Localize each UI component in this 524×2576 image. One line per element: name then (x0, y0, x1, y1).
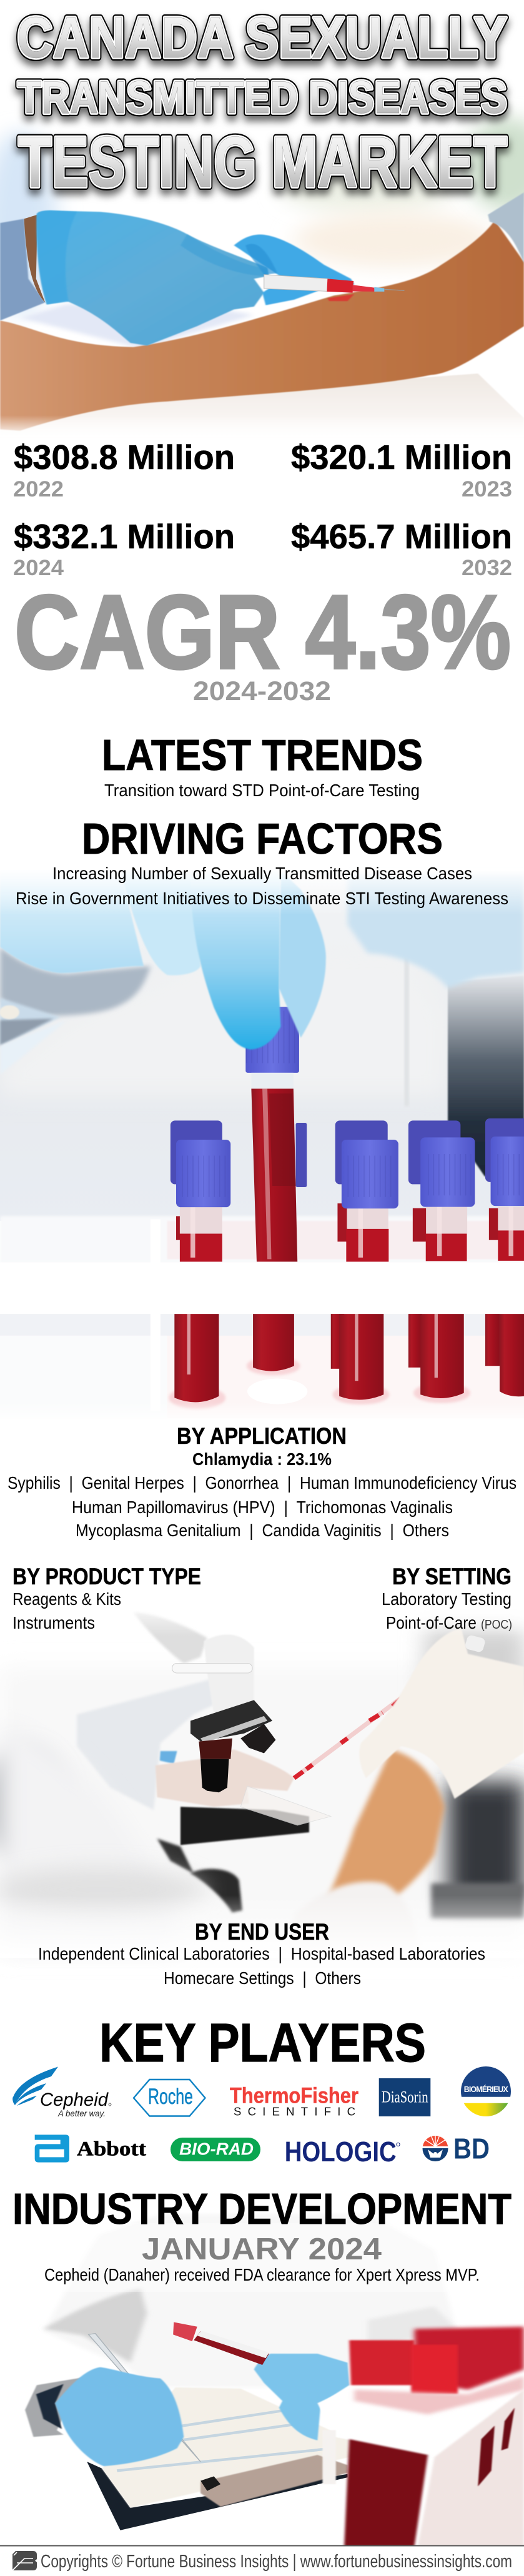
back caps (171, 1118, 524, 1187)
photo fade top (0, 868, 524, 915)
logo: Cepheid (12, 2067, 111, 2118)
stat 2024: 2024 (13, 556, 64, 580)
logo: Thermo Fisher Scientific: ThermoFisher (230, 2084, 358, 2108)
logo: DiaSorin: DiaSorin (382, 2088, 428, 2106)
logo: BD: BD (453, 2133, 490, 2165)
back tubes (176, 1203, 498, 1241)
segment: by end user (38, 1919, 485, 1988)
driving factors text (16, 864, 508, 908)
stat 2023: 2023 (462, 477, 512, 501)
photo fade top (0, 1599, 524, 1636)
stat 2032: $465.7 Million (291, 517, 512, 556)
logo: Roche: Roche (148, 2085, 193, 2109)
segment: by product type (12, 1564, 201, 1632)
segment: by product type: Instruments (12, 1613, 95, 1632)
segment: by application: Mycoplasma Genitalium | Candida Vaginitis | Others (76, 1521, 449, 1540)
market size stats (13, 438, 512, 580)
rack top (0, 1216, 524, 1264)
development date: JANUARY 2024 (142, 2233, 382, 2266)
segment: by setting (382, 1564, 512, 1632)
stat 2032 (291, 517, 512, 580)
photo fade bottom (0, 1895, 524, 1958)
photo: microscope and pipette (0, 1612, 524, 1953)
stat 2032: 2032 (462, 556, 512, 580)
logo: Cepheid: A better way. (57, 2108, 106, 2118)
stat 2023: $320.1 Million (291, 438, 512, 476)
logo: Roche (134, 2080, 205, 2116)
logo: Cepheid: Cepheid (40, 2090, 109, 2110)
lower tubes (174, 1314, 524, 1402)
photo fade bottom (0, 1402, 524, 1423)
pink halos (169, 1356, 470, 1409)
logo: Abbott (35, 2134, 146, 2163)
segment: by product type: BY PRODUCT TYPE (12, 1564, 201, 1589)
logo: Thermo Fisher Scientific: SCIENTIFIC (234, 2105, 355, 2118)
logo: Bio-Rad: BIO-RAD (179, 2139, 254, 2159)
CAGR period: 2024-2032 (193, 676, 331, 706)
segment: by application: Chlamydia : 23.1% (192, 1449, 332, 1469)
photo fade top (0, 2223, 524, 2292)
photo: gloved hand picking blood tube (0, 871, 524, 1418)
latest trends text: Transition toward STD Point-of-Care Testing (104, 781, 420, 800)
stat 2022: $308.8 Million (14, 438, 235, 476)
logo: Bio-Rad (171, 2138, 260, 2161)
segment: by product type: Reagents & Kits (12, 1589, 121, 1609)
photo: technician with blood test tube and clipboard (0, 2214, 524, 2547)
logo: bioMerieux: BIOMÉRIEUX (464, 2085, 508, 2094)
heading: key players: KEY PLAYERS (99, 2013, 426, 2073)
logo: BD (422, 2136, 488, 2161)
syringe (264, 275, 404, 293)
logo: Abbott: Abbott (77, 2138, 146, 2161)
stat 2023 (291, 438, 512, 501)
segment: by application (7, 1423, 517, 1540)
segment: by application: Human Papillomavirus (HPV) | Trichomonas Vaginalis (72, 1498, 453, 1517)
logo: Thermo Fisher Scientific (230, 2084, 358, 2118)
clipboard (87, 2387, 349, 2530)
stat 2024 (13, 517, 235, 580)
long tube (251, 1073, 297, 1261)
segment: by end user: Homecare Settings | Others (164, 1968, 361, 1988)
segment: by end user: Independent Clinical Laboratories | Hospital-based Laboratories (38, 1944, 485, 1963)
icon: Fortune Business Insights logo (12, 2551, 37, 2570)
segment: by end user: BY END USER (195, 1919, 329, 1945)
stat 2022 (13, 438, 235, 501)
title (17, 5, 507, 202)
footer (0, 2545, 524, 2576)
logo: bioMerieux (461, 2066, 511, 2116)
held cap (245, 1007, 299, 1073)
driving factors text: Increasing Number of Sexually Transmitted Disease Cases (52, 864, 472, 883)
stat 2022: 2022 (13, 477, 64, 501)
segment: by setting: (POC) (481, 1618, 512, 1632)
heading: driving factors: DRIVING FACTORS (82, 814, 443, 863)
logo: DiaSorin (379, 2078, 430, 2116)
photo: nurse drawing blood from arm (0, 117, 524, 437)
segment: by setting: Laboratory Testing (382, 1589, 512, 1609)
front tubes (180, 1207, 524, 1261)
front caps (176, 1137, 524, 1208)
blood test tube (173, 2322, 269, 2365)
stat 2024: $332.1 Million (14, 517, 235, 556)
segment: by application: BY APPLICATION (177, 1423, 347, 1449)
photo fade (0, 415, 524, 437)
heading: latest trends: LATEST TRENDS (102, 731, 423, 779)
segment: by setting: Point-of-Care (386, 1613, 477, 1632)
logo: Hologic: HOLOGIC (285, 2136, 397, 2168)
glove fingers (0, 871, 144, 973)
